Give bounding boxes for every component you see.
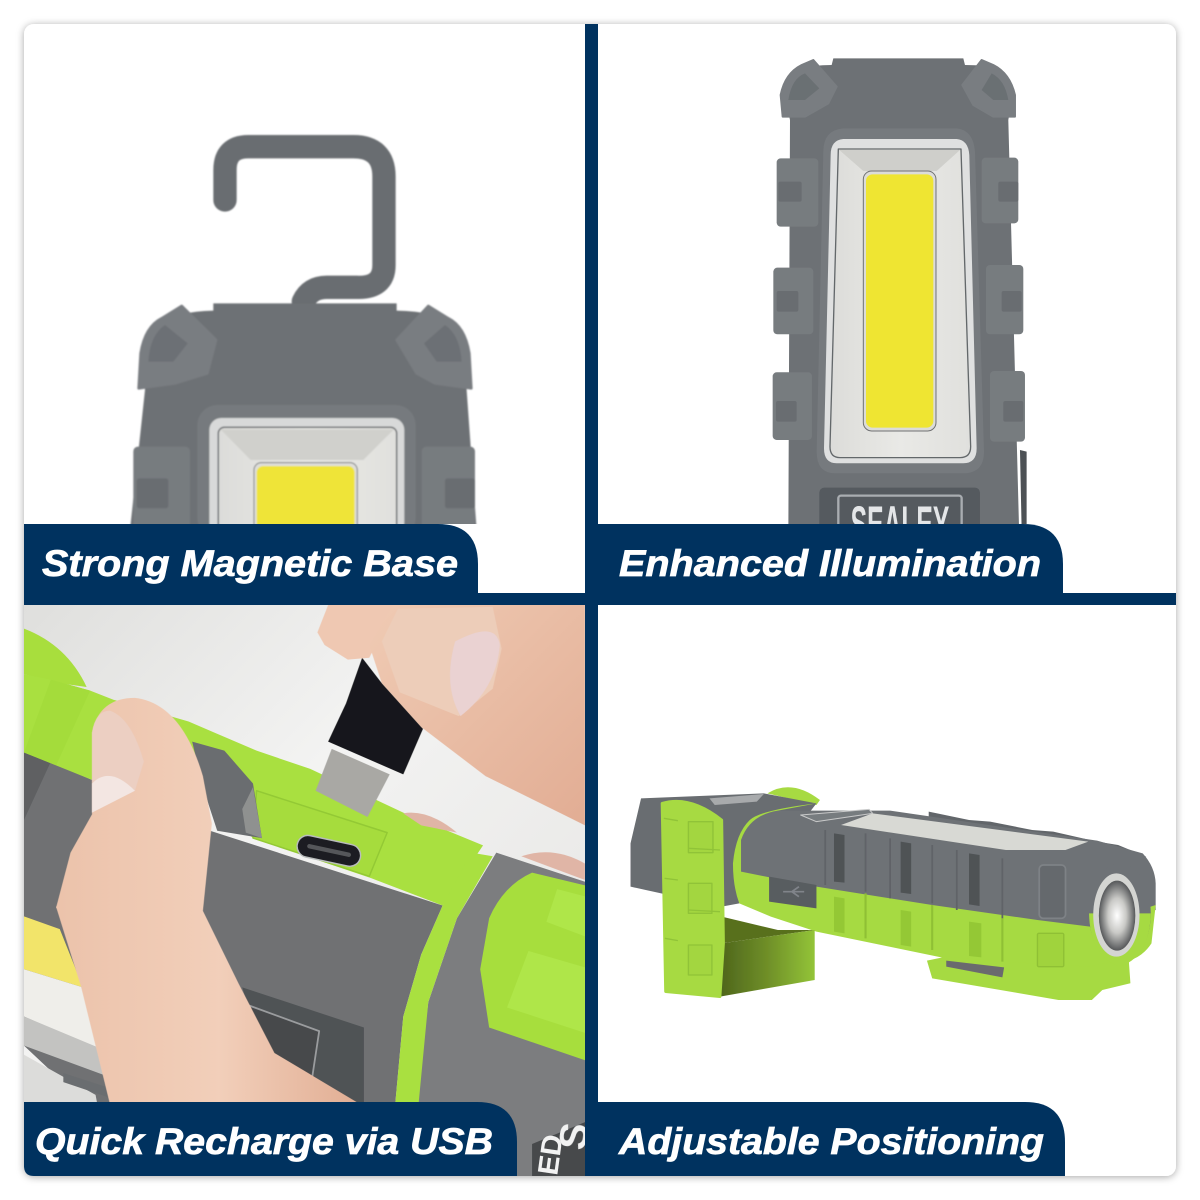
label: adjustable positioning [598, 1102, 1065, 1176]
label: strong magnetic base [24, 524, 478, 593]
label: enhanced illumination [598, 524, 1063, 593]
usb cable [316, 658, 423, 817]
label: quick recharge via usb: Quick Recharge via USB [35, 1121, 493, 1162]
panel: enhanced illumination [773, 58, 1027, 552]
hand: fingers [317, 605, 585, 825]
hand: thumbnail [92, 711, 144, 813]
label: strong magnetic base: Strong Magnetic Base [42, 543, 458, 584]
panel: adjustable positioning [631, 787, 1156, 1000]
work light front view: SEALEY [851, 496, 949, 552]
work light with usb port [24, 629, 598, 1188]
panel: strong magnetic base [130, 147, 477, 538]
label: quick recharge via usb [24, 1102, 517, 1176]
work light with usb port: S [551, 1120, 598, 1153]
hand: thumb [56, 698, 382, 1133]
label: enhanced illumination: Enhanced Illumination [619, 543, 1041, 584]
work light front view [773, 58, 1027, 552]
panel: quick recharge via usb [24, 605, 598, 1188]
work light body [130, 303, 477, 538]
bracket [722, 917, 815, 943]
label: adjustable positioning: Adjustable Positioning [618, 1121, 1044, 1162]
hand behind [403, 813, 585, 880]
icon: usb symbol [783, 887, 804, 897]
work light with usb port: ED [533, 1132, 570, 1177]
icon: hanging hook [225, 147, 384, 302]
icon: torch lens [1089, 863, 1151, 967]
angled work light [631, 787, 1156, 1000]
